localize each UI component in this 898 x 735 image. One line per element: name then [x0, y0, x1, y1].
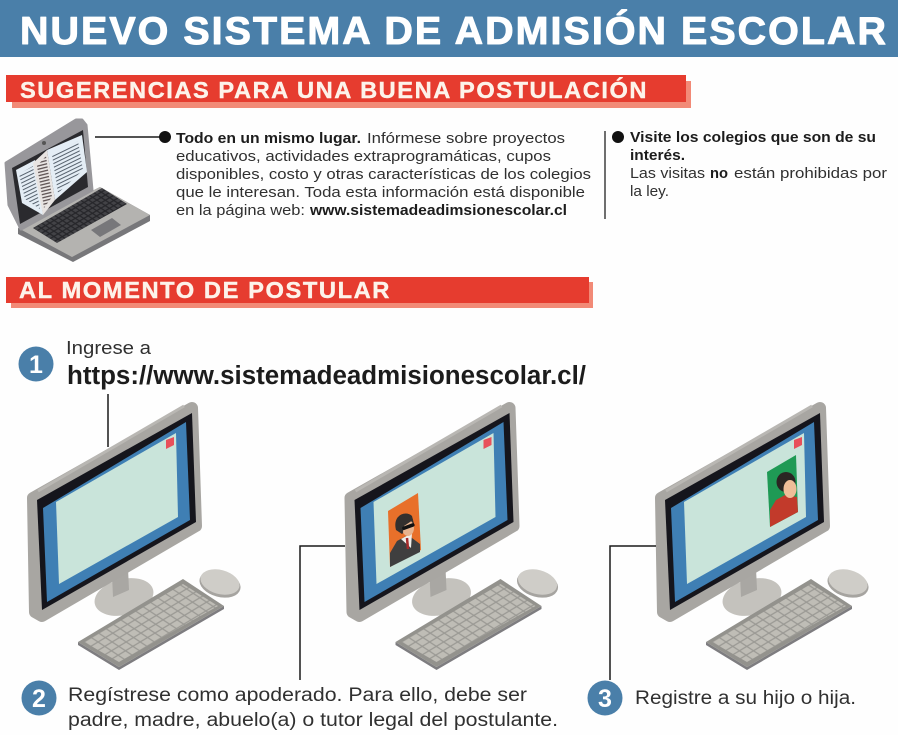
heading: al momento de postular: AL MOMENTO DE POSTULAR	[19, 277, 391, 303]
text block: todo en un mismo lugar	[176, 131, 591, 219]
monitor frame	[33, 406, 196, 616]
mouse	[196, 565, 244, 602]
text block: visite los colegios: Visite los colegios que son de su	[630, 130, 876, 146]
text block: todo en un mismo lugar: www.sistemadeadimsionescolar.cl	[309, 203, 567, 219]
keyboard	[78, 579, 224, 670]
bullet	[612, 131, 624, 143]
text block: visite los colegios: interés.	[630, 148, 685, 164]
text block: visite los colegios: Las visitas	[630, 166, 705, 182]
step 2 text: padre, madre, abuelo(a) o tutor legal del postulante.	[68, 710, 558, 731]
text block: todo en un mismo lugar: disponibles, costo y otras características de los colegios	[176, 167, 591, 183]
text block: todo en un mismo lugar: educativos, actividades extraprogramáticas, cupos	[176, 149, 551, 165]
step 2 connector	[300, 546, 345, 680]
text block: todo en un mismo lugar: en la página web:	[176, 203, 305, 219]
text block: visite los colegios: la ley.	[630, 184, 669, 200]
step 1 text: https://www.sistemadeadmisionescolar.cl/	[67, 362, 586, 390]
text block: todo en un mismo lugar: que le interesan. Toda esta información está disponible	[176, 185, 585, 201]
computer 2	[300, 406, 561, 680]
text block: todo en un mismo lugar: Todo en un mismo lugar.	[176, 131, 361, 147]
computer 3	[610, 406, 872, 680]
step 1 text: Ingrese a	[66, 338, 152, 358]
text block: todo en un mismo lugar: Infórmese sobre proyectos	[367, 131, 565, 147]
divider	[604, 131, 606, 219]
text block: visite los colegios: están prohibidas por	[734, 166, 887, 182]
photo: student	[767, 455, 798, 527]
step 3 badge	[588, 680, 622, 716]
text block: visite los colegios	[630, 130, 887, 200]
step 1 badge: 1	[29, 351, 43, 379]
step 2 badge: 2	[32, 685, 46, 713]
step 1 badge	[18, 346, 54, 382]
book pages	[16, 135, 87, 215]
step 1 text	[66, 338, 586, 390]
step 3 connector	[610, 546, 656, 680]
heading: sugerencias: SUGERENCIAS PARA UNA BUENA POSTULACIÓN	[20, 76, 648, 103]
text block: visite los colegios: no	[710, 166, 728, 182]
step 3 badge: 3	[598, 685, 612, 713]
step 2 text	[68, 685, 558, 731]
photo: adult with glasses	[388, 493, 421, 567]
heading: al momento de postular	[6, 277, 593, 308]
icon: laptop with book	[6, 120, 150, 262]
callout line to text	[95, 131, 171, 143]
title banner	[0, 0, 898, 57]
step 2 text: Regístrese como apoderado. Para ello, debe ser	[68, 685, 528, 706]
monitor stand	[91, 568, 157, 622]
step 2 badge	[22, 680, 56, 716]
computer 1	[33, 406, 244, 670]
step 1 connector	[107, 394, 109, 447]
title: NUEVO SISTEMA DE ADMISIÓN ESCOLAR	[20, 9, 888, 53]
step 3 text: Registre a su hijo o hija.	[635, 688, 856, 709]
